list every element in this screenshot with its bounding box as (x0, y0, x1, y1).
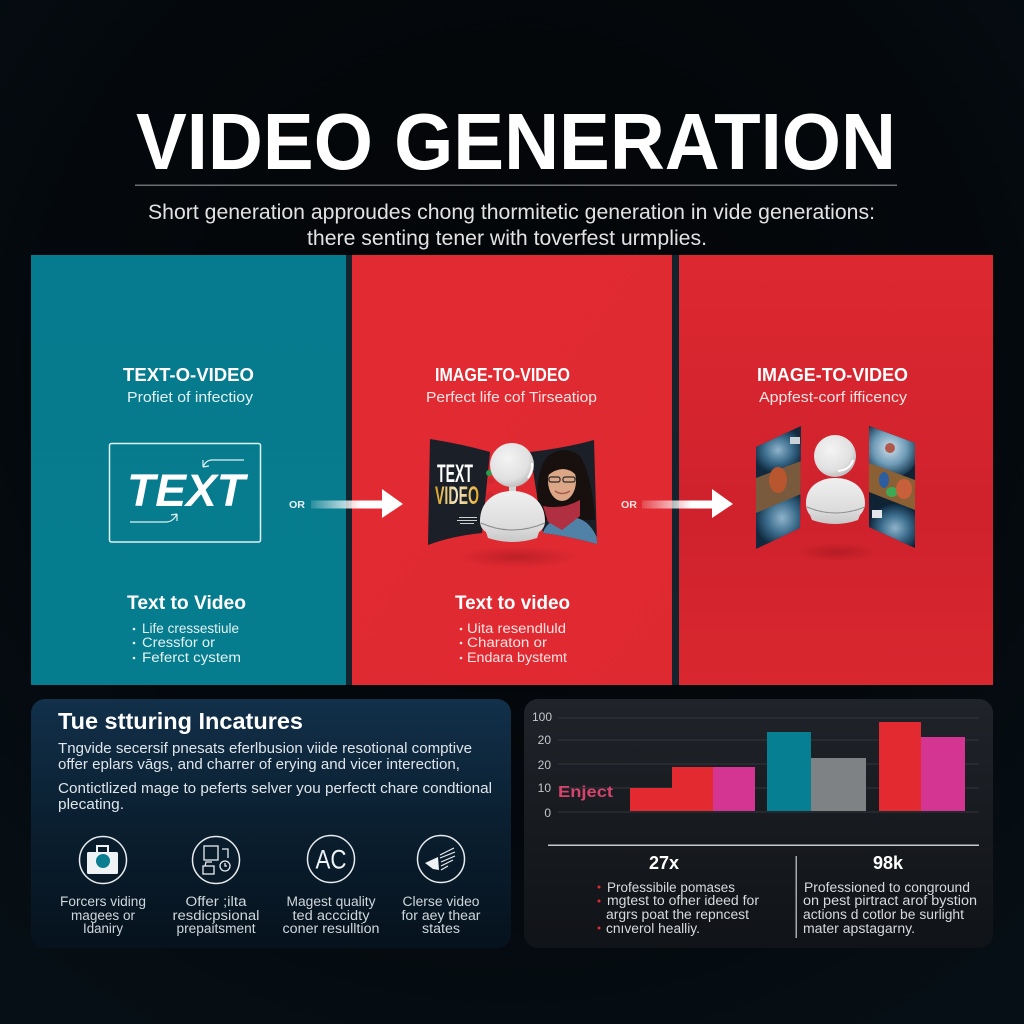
panel captions: image to video: Endara bystemt (467, 650, 567, 665)
icon: text box: TEXT (127, 465, 249, 516)
icon labels: for aey thear (402, 908, 481, 923)
icon labels: resdicpsional (172, 908, 260, 923)
stat: 98k: actions d cotlor be surlight (803, 907, 964, 922)
panel: text to video (31, 255, 346, 685)
illustration: avatar with film strips (756, 426, 915, 558)
features heading: Tue stturing Incatures (58, 708, 303, 734)
panel: features (31, 699, 511, 948)
panel heading: IMAGE-TO-VIDEO: IMAGE-TO-VIDEO (435, 365, 570, 385)
panel caption heading: Text to Video (127, 593, 246, 614)
stat: 98k (803, 853, 977, 936)
stat: 27x: cnıverol healliy. (606, 921, 700, 936)
stat: 98k: Professioned to conground (804, 880, 970, 895)
icon labels: Magest quality (286, 894, 376, 909)
icon labels: coner resulltion (282, 921, 380, 936)
illustration: avatar with video cards (428, 439, 600, 568)
arrow: image to image: OR (621, 499, 637, 511)
illustration: avatar with video cards: TEXT (437, 460, 473, 488)
stat: 27x: 27x (649, 853, 679, 873)
icon: projector beam (418, 836, 464, 882)
bullet list: Cressfor or (142, 635, 216, 650)
panel: chart and stats (524, 699, 993, 948)
subtitle: Short generation approudes chong thormitetic generation in vide generations: (148, 201, 875, 224)
bar chart: 20 (538, 733, 551, 747)
features body text: Tngvide secersif pnesats eferlbusion viide resotional comptive (58, 740, 472, 757)
bar chart (532, 710, 979, 820)
subtitle: there senting tener with toverfest urmplies. (307, 227, 707, 250)
panel subheading: Appfest-corf ifficency (759, 389, 908, 406)
features body text: Contictlized mage to peferts selver you perfectt chare condtional (58, 780, 492, 797)
arrow: text to image (289, 489, 403, 518)
subtitle (148, 201, 875, 250)
icon: text box (110, 444, 260, 542)
icon labels: states (422, 921, 460, 936)
stat: 27x (598, 853, 760, 936)
icon: media frames (192, 836, 240, 884)
bar chart: 10 (538, 781, 551, 795)
bullet list: Life cressestiule (142, 621, 239, 636)
arrow: text to image: OR (289, 499, 305, 511)
panel captions: image to video: Uita resendluld (467, 621, 566, 636)
icon: camera case (80, 836, 126, 884)
panel: image to video A (352, 255, 672, 685)
icon: AC badge (308, 836, 354, 882)
icon labels: Offer ;ilta (186, 894, 247, 909)
panel captions: image to video: Charaton or (467, 635, 548, 650)
illustration: avatar with video cards: VIDEO (435, 482, 479, 510)
bar chart: Enject (558, 784, 613, 801)
features body text (58, 740, 492, 813)
bar chart: 20 (538, 758, 551, 772)
bar chart: 100 (532, 710, 552, 724)
panel subheading: Profiet of infectioy (127, 389, 254, 406)
icon: AC badge: AC (316, 844, 346, 874)
panel captions: image to video (455, 593, 570, 665)
bullet list: Feferct cystem (142, 650, 241, 665)
bar chart: 0 (544, 806, 551, 820)
panel captions: image to video: Text to video (455, 593, 570, 614)
icon labels: Forcers viding (60, 894, 146, 909)
arrow: image to image (621, 489, 733, 518)
stat: 27x: Professibile pomases (607, 880, 735, 895)
panel subheading: Perfect life cof Tirseatiop (426, 389, 597, 406)
bullet list (133, 621, 241, 665)
panel: image to video B (679, 255, 993, 685)
icon labels: magees or (71, 908, 135, 923)
icon labels: Clerse video (402, 894, 480, 909)
icon labels: ted acccidty (292, 908, 370, 923)
stat: 27x: mgtest to ofher ideed for (607, 893, 760, 908)
icon labels: prepaitsment (176, 921, 256, 936)
stat: 98k: 98k (873, 853, 904, 873)
features body text: offer eplars vāgs, and charrer of erying and vicer interection, (58, 756, 460, 773)
panel heading: IMAGE-TO-VIDEO: IMAGE-TO-VIDEO (757, 365, 908, 385)
title: VIDEO GENERATION (136, 97, 896, 186)
features body text: plecating. (58, 796, 124, 813)
icon labels (60, 894, 481, 936)
stat: 98k: on pest pirtract arof bystion (803, 893, 977, 908)
icon labels: Idaniry (83, 921, 123, 936)
stat: 27x: argrs poat the repncest (606, 907, 749, 922)
panel heading: TEXT-O-VIDEO: TEXT-O-VIDEO (123, 365, 254, 385)
stat: 98k: mater apstagarny. (803, 921, 915, 936)
